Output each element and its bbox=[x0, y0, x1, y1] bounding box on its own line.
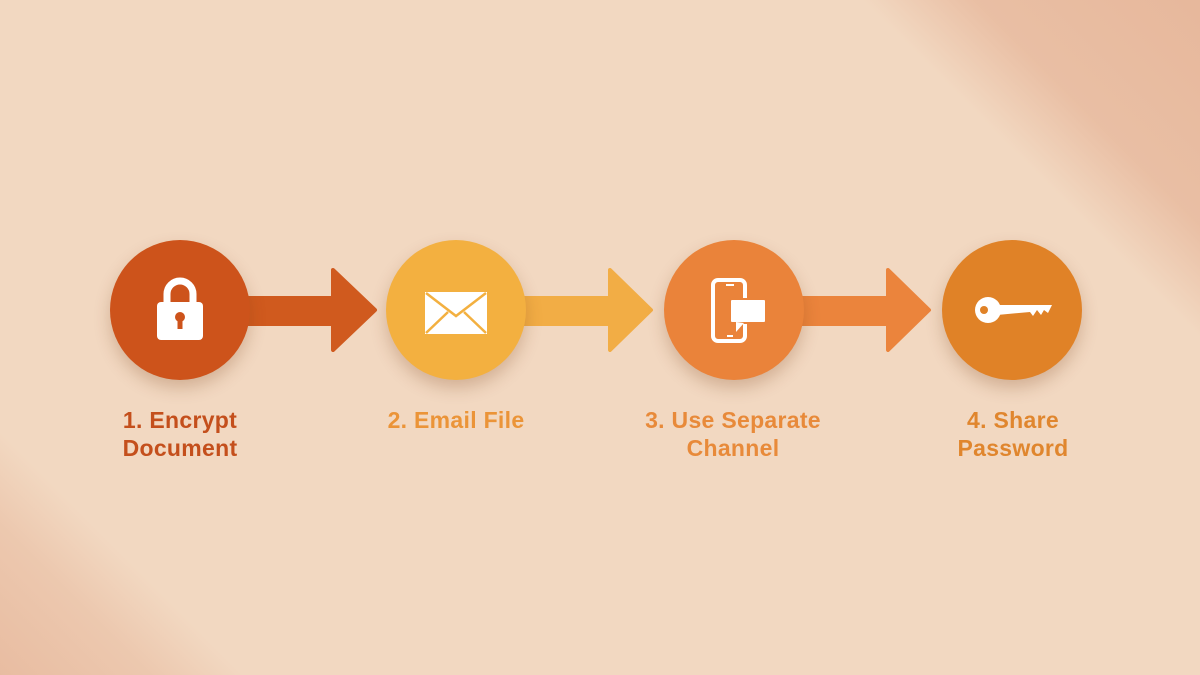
arrow 2 bbox=[524, 268, 654, 352]
label 4 bbox=[957, 407, 1069, 461]
arrow 3 bbox=[802, 268, 932, 352]
step 3 circle: phone chat bbox=[664, 240, 804, 380]
arrow 1 bbox=[248, 268, 378, 352]
label 3 bbox=[645, 407, 821, 461]
step 1 circle: lock bbox=[110, 240, 250, 380]
step 4 circle: key bbox=[942, 240, 1082, 380]
label 1 bbox=[123, 407, 237, 461]
label 4: 4. Share bbox=[967, 407, 1059, 433]
label 4: Password bbox=[957, 435, 1069, 461]
label 1: Document bbox=[123, 435, 237, 461]
label 3: Channel bbox=[687, 435, 779, 461]
label 3: 3. Use Separate bbox=[645, 407, 821, 433]
label 1: 1. Encrypt bbox=[123, 407, 237, 433]
step 2 circle: envelope bbox=[386, 240, 526, 380]
label 2: 2. Email File bbox=[388, 407, 524, 433]
